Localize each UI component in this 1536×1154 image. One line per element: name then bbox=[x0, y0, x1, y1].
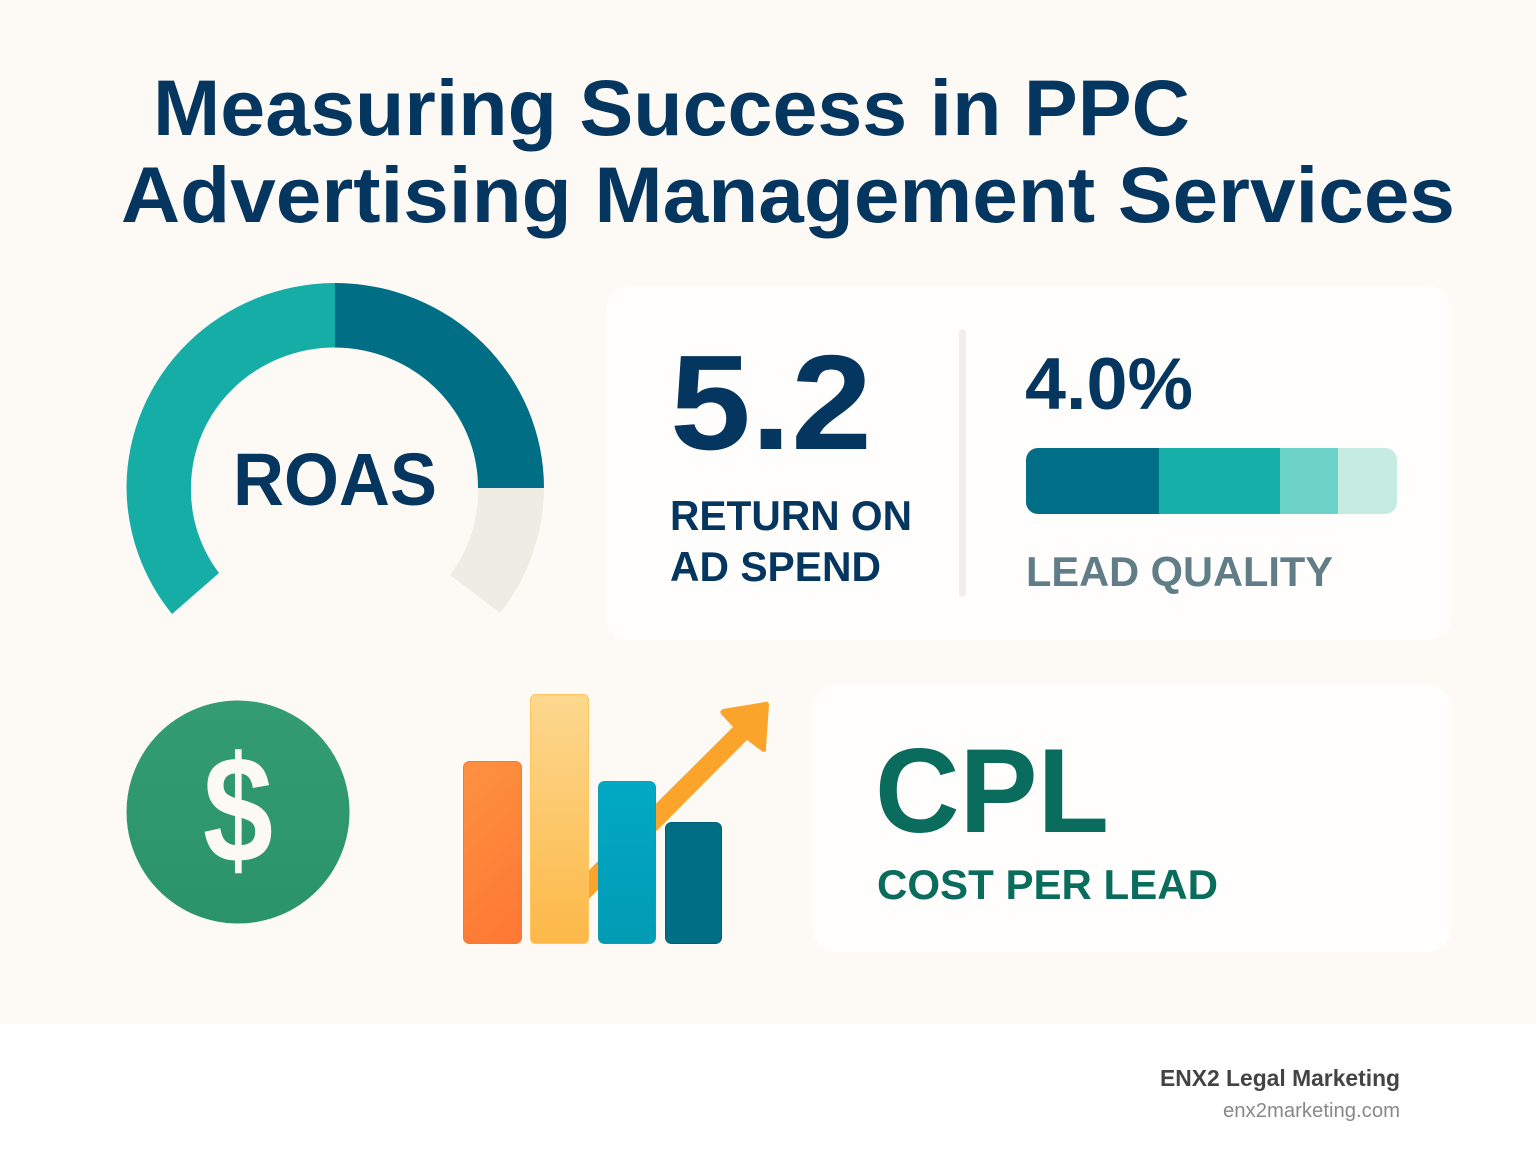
panel: ROAS and lead quality bbox=[671, 329, 1397, 597]
arrow bbox=[570, 702, 769, 918]
chart: growth bars and arrow bbox=[464, 694, 769, 944]
footer url: enx2marketing.com bbox=[1223, 1100, 1400, 1122]
chart: ROAS gauge bbox=[126, 283, 544, 614]
gauge label: ROAS bbox=[233, 438, 437, 521]
title: Measuring Success in PPC bbox=[153, 63, 1190, 152]
bar: blue bbox=[598, 782, 656, 944]
gauge segment: teal bbox=[126, 283, 335, 614]
bar: dark teal bbox=[666, 822, 722, 944]
footer bbox=[1160, 1065, 1400, 1122]
gauge segment: dark teal bbox=[335, 283, 544, 488]
divider bbox=[959, 329, 966, 597]
gauge segment: light grey bbox=[450, 488, 544, 613]
stat: 5.2: 5.2 bbox=[670, 327, 872, 478]
label: return on ad spend bbox=[670, 492, 912, 590]
card bbox=[606, 286, 1451, 640]
label: return on ad spend: RETURN ON bbox=[670, 492, 912, 539]
panel: cost per lead bbox=[813, 684, 1451, 952]
icon: dollar coin bbox=[126, 700, 350, 924]
title bbox=[121, 63, 1455, 239]
icon: dollar coin: $ bbox=[203, 725, 273, 895]
label: cost per lead: COST PER LEAD bbox=[877, 861, 1218, 908]
card bbox=[813, 684, 1451, 952]
stat: 4.0%: 4.0% bbox=[1025, 344, 1193, 425]
title: Advertising Management Services bbox=[121, 150, 1455, 239]
stat: CPL: CPL bbox=[875, 724, 1109, 858]
label: lead quality: LEAD QUALITY bbox=[1026, 548, 1333, 595]
bar: orange bbox=[464, 762, 522, 944]
footer brand: ENX2 Legal Marketing bbox=[1160, 1065, 1400, 1091]
label: return on ad spend: AD SPEND bbox=[670, 543, 881, 590]
stacked bar: lead quality bbox=[1026, 448, 1397, 514]
bar: yellow bbox=[530, 694, 588, 944]
